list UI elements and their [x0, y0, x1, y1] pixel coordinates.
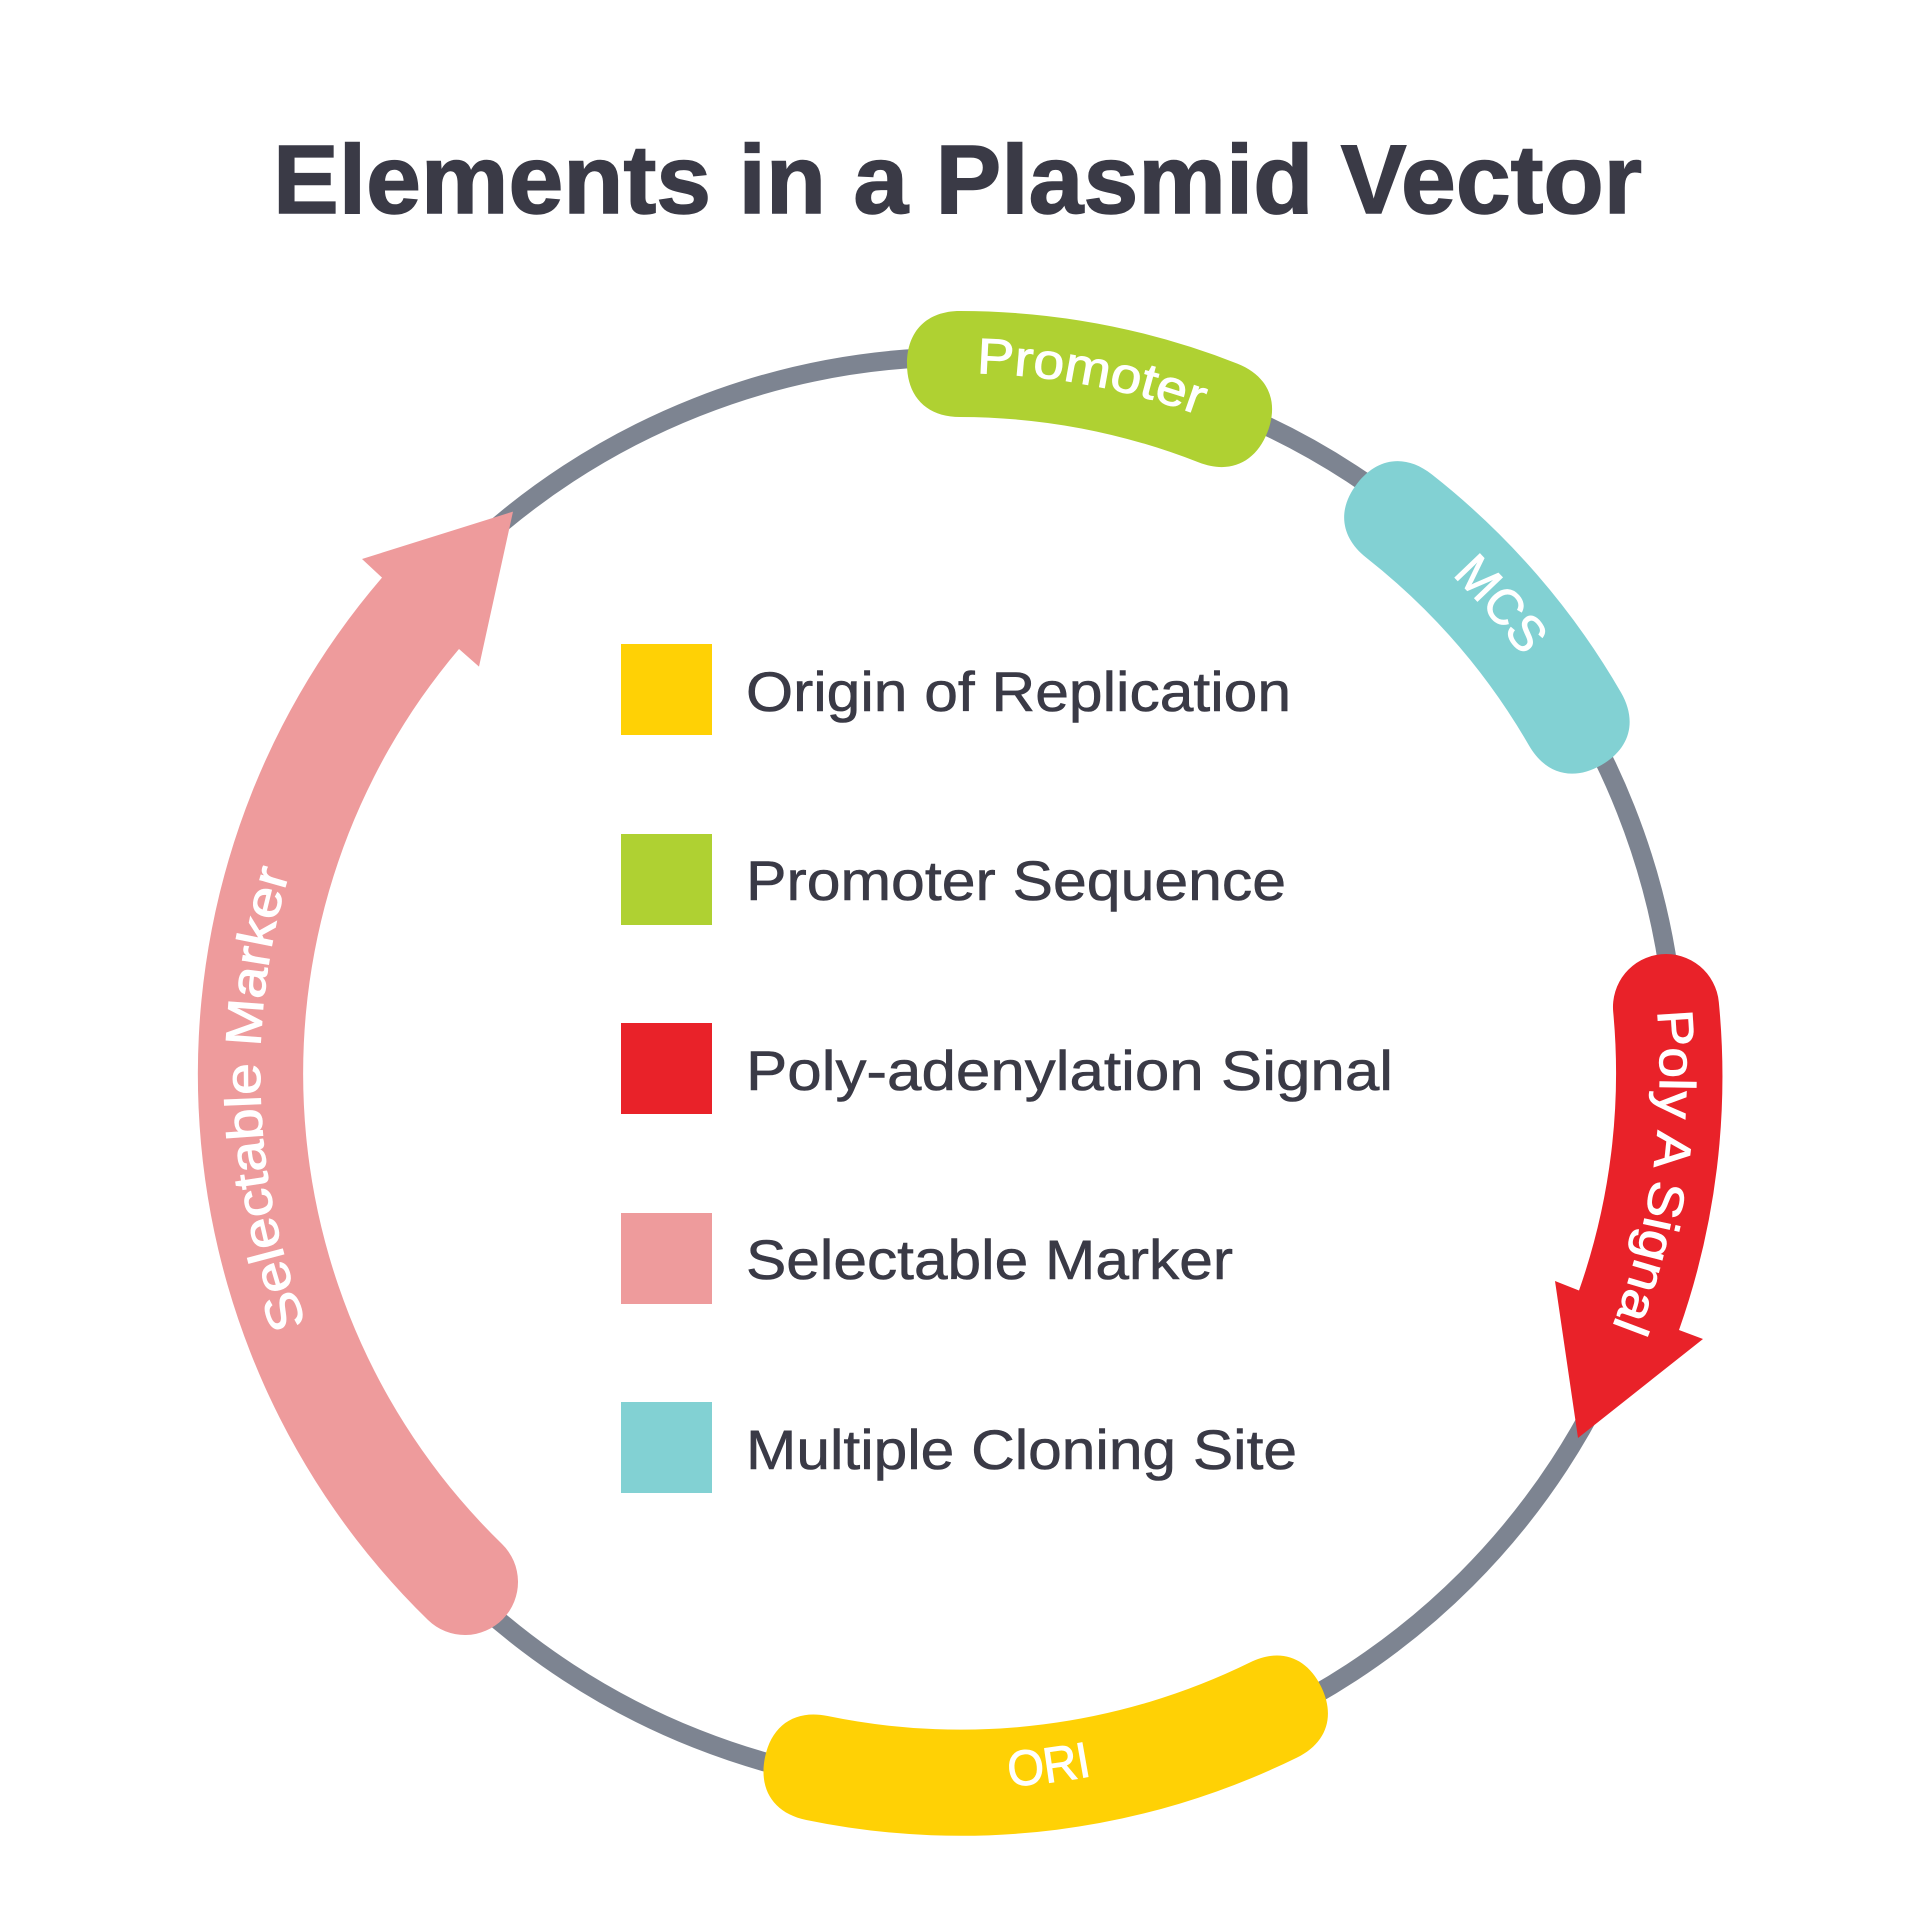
legend item: multiple cloning site	[621, 1402, 1297, 1493]
title: Elements in a Plasmid Vector	[273, 125, 1642, 234]
label: MCS: MCS	[1454, 553, 1546, 652]
arrow: poly A signal	[1555, 954, 1722, 1438]
legend item: origin of replication	[621, 644, 1291, 735]
segment: origin of replication	[763, 1656, 1328, 1836]
legend item: promoter sequence: Promoter Sequence	[746, 849, 1286, 912]
legend item: selectable marker	[621, 1213, 1233, 1304]
legend item: poly-adenylation signal: Poly-adenylation Signal	[746, 1039, 1393, 1102]
legend item: selectable marker: Selectable Marker	[746, 1228, 1233, 1291]
label: ORI: ORI	[1009, 1742, 1089, 1786]
segment: multiple cloning site	[1344, 461, 1630, 774]
label: selectable marker: Selectable Marker	[224, 865, 303, 1330]
legend item: promoter sequence	[621, 834, 1286, 925]
legend item: multiple cloning site: Multiple Cloning Site	[746, 1418, 1297, 1481]
arrow: selectable marker	[198, 512, 518, 1635]
legend	[621, 644, 1393, 1493]
legend item: origin of replication: Origin of Replication	[746, 660, 1291, 723]
label: poly A signal: Poly A Signal	[1613, 1012, 1697, 1337]
label: promoter: Promoter	[980, 338, 1208, 413]
legend item: poly-adenylation signal	[621, 1023, 1393, 1114]
plasmid ring	[244, 357, 1676, 1789]
segment: promoter	[906, 311, 1272, 468]
